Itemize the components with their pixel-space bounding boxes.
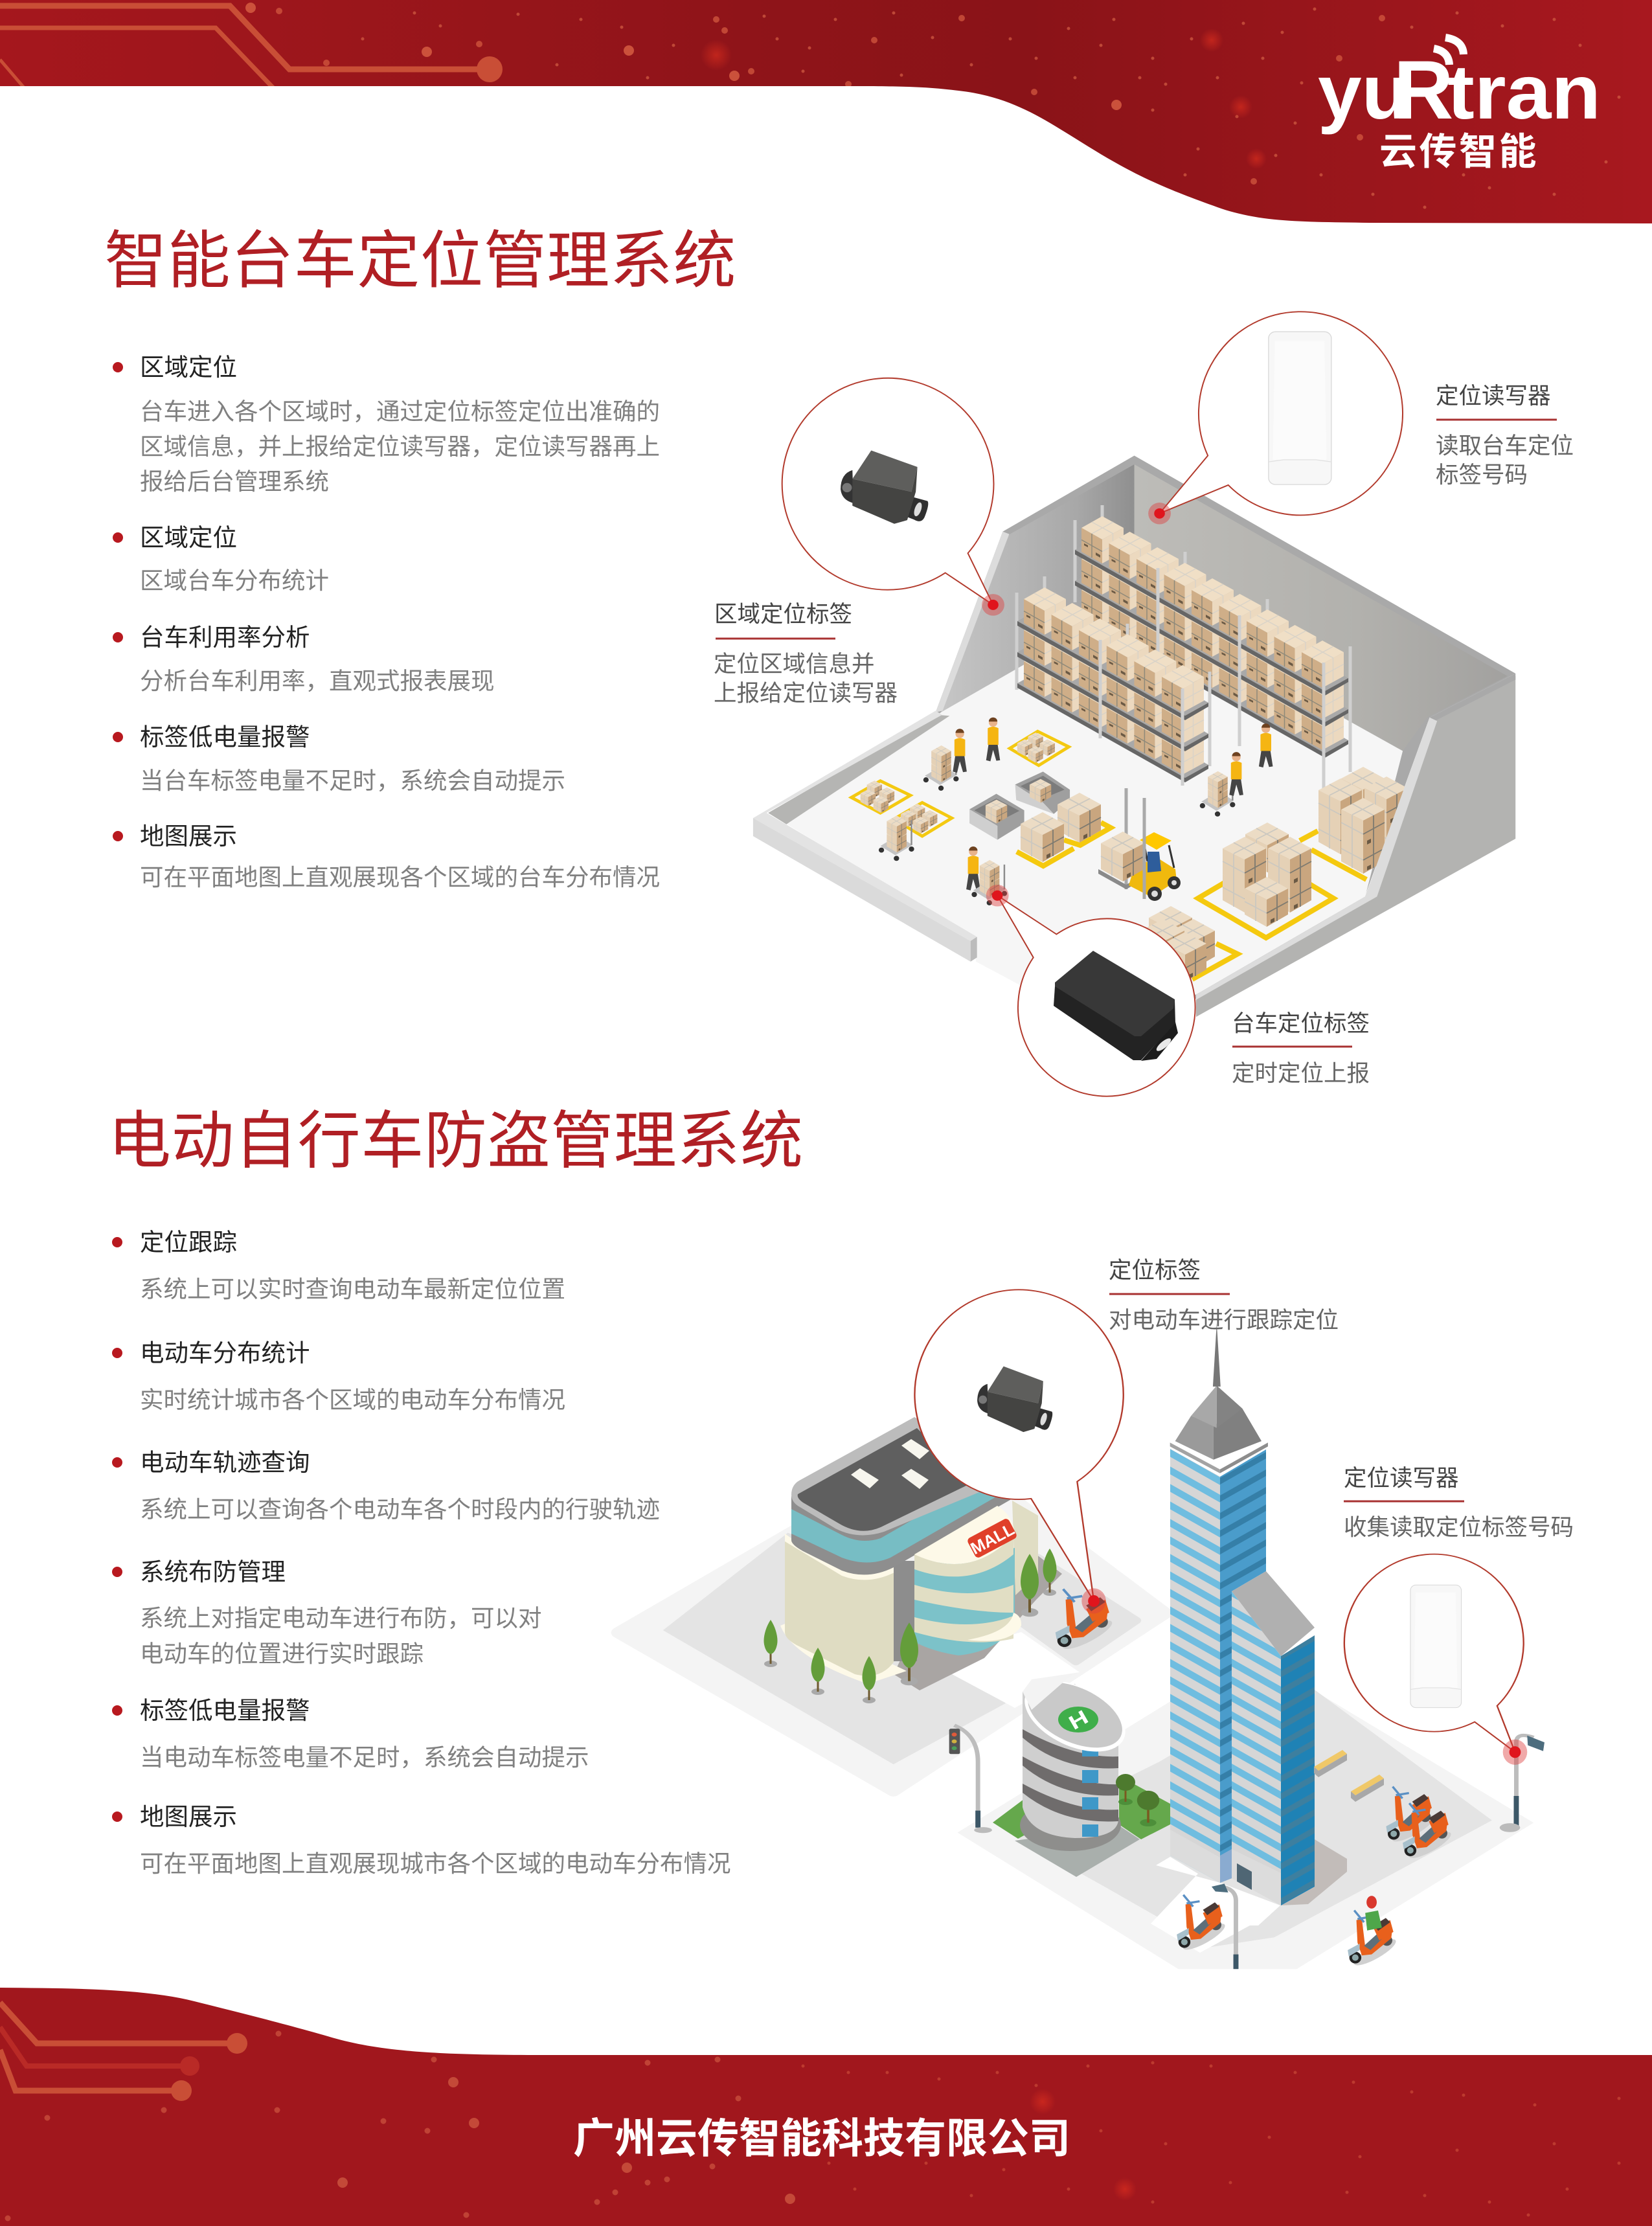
mall trees [764, 1549, 1057, 1703]
label: 定位读写器: 定位读写器 [1436, 383, 1551, 409]
logo wifi arcs [1434, 38, 1464, 65]
MALL sign: MALL [967, 1519, 1017, 1558]
logo: yuRtran: yu [1318, 49, 1410, 135]
item: 地图展示: 地图展示 [140, 823, 237, 850]
office tower [1170, 1449, 1347, 1905]
callout: trolley tag [986, 885, 1195, 1096]
label: 定位读写器 [1436, 383, 1574, 488]
helipad building [993, 1666, 1170, 1877]
small carton groups [861, 733, 1055, 834]
large carton stacks [1141, 767, 1408, 982]
item: 电动车分布统计 [112, 1339, 565, 1413]
item: 系统布防管理: 系统布防管理 [140, 1558, 286, 1585]
feature list: section 1 [113, 354, 660, 891]
device: trolley tag [1054, 951, 1178, 1061]
forklift [1098, 788, 1181, 901]
item: 电动车轨迹查询: 电动车轨迹查询 [140, 1449, 310, 1476]
item: 区域定位: 区域定位 [140, 354, 237, 381]
item: 定位跟踪: 定位跟踪 [140, 1229, 237, 1256]
title: section 2: 电动自行车防盗管理系统 [108, 1106, 804, 1176]
item: 台车利用率分析: 台车利用率分析 [140, 624, 310, 651]
item: 电动车轨迹查询: 系统上可以查询各个电动车各个时段内的行驶轨迹 [140, 1496, 660, 1523]
callout: reader [1344, 1554, 1527, 1765]
label: 定位读写器: 读取台车定位 [1436, 433, 1574, 459]
item: 电动车分布统计: 电动车分布统计 [140, 1339, 310, 1367]
label: 定位标签: 定位标签 [1109, 1257, 1201, 1283]
top red banner [0, 0, 1652, 223]
item: 电动车分布统计: 实时统计城市各个区域的电动车分布情况 [140, 1387, 565, 1413]
item: 标签低电量报警 [112, 1697, 589, 1771]
callouts with markers [782, 312, 1403, 1096]
logo chinese name: 云传智能 [1379, 131, 1539, 173]
callout: reader [1148, 312, 1403, 525]
item: 标签低电量报警: 标签低电量报警 [140, 723, 310, 751]
item: 区域定位: 台车进入各个区域时，通过定位标签定位出准确的 [140, 398, 660, 425]
mall building [780, 1417, 1062, 1690]
item: 标签低电量报警: 标签低电量报警 [140, 1697, 310, 1724]
logo: yuRtran [1318, 38, 1601, 173]
yellow floor markings [852, 731, 1069, 836]
item: 系统布防管理 [112, 1558, 541, 1667]
item: 标签低电量报警 [113, 723, 565, 794]
bottom red banner [0, 1988, 1652, 2226]
front rack with cartons [1017, 576, 1210, 786]
item: 台车利用率分析 [113, 624, 495, 694]
warehouse walls and floor [753, 456, 1515, 999]
label: 区域定位标签: 定位区域信息并 [714, 651, 875, 677]
item: 地图展示: 地图展示 [140, 1803, 237, 1830]
item: 台车利用率分析: 分析台车利用率，直观式报表展现 [140, 668, 495, 694]
scooters [1056, 1589, 1454, 1970]
item: 地图展示: 可在平面地图上直观展现各个区域的台车分布情况 [140, 864, 660, 891]
item: 区域定位 statistics: 区域定位 [140, 524, 237, 551]
item: 系统布防管理: 系统上对指定电动车进行布防，可以对 [140, 1605, 541, 1631]
grey bins [969, 771, 1070, 840]
logo: yuRtran: tran [1447, 49, 1601, 135]
callout: zone tag [782, 378, 1004, 616]
label: 区域定位标签: 区域定位标签 [714, 601, 852, 627]
item: 区域定位: 报给后台管理系统 [140, 468, 329, 495]
label: 定位读写器: 定位读写器 [1344, 1465, 1459, 1491]
feature list: section 2 [112, 1229, 730, 1877]
street lights [949, 1725, 1545, 1969]
item: 区域定位 [113, 354, 660, 495]
warehouse illustration [753, 312, 1515, 1096]
item: 区域定位 statistics: 区域台车分布统计 [140, 567, 329, 594]
ground plates [618, 1445, 1533, 1969]
label: 定位读写器: 收集读取定位标签号码 [1344, 1514, 1574, 1540]
label: 定位读写器: 标签号码 [1436, 462, 1528, 488]
item: 标签低电量报警: 当电动车标签电量不足时，系统会自动提示 [140, 1744, 589, 1771]
item: 地图展示: 可在平面地图上直观展现城市各个区域的电动车分布情况 [140, 1850, 730, 1877]
label: 定位读写器 [1344, 1465, 1574, 1540]
tower roof and spire [1170, 1323, 1268, 1473]
item: 区域定位 statistics [113, 524, 329, 594]
city illustration [618, 1289, 1545, 1970]
benches [1314, 1750, 1384, 1802]
label: 区域定位标签: 上报给定位读写器 [714, 680, 898, 706]
item: 定位跟踪: 系统上可以实时查询电动车最新定位位置 [140, 1276, 565, 1302]
label: 台车定位标签: 定时定位上报 [1232, 1060, 1370, 1086]
logo: yuRtran: R [1394, 44, 1453, 137]
label: 定位标签 [1109, 1257, 1339, 1333]
workers and trolleys [879, 718, 1273, 905]
item: 电动车轨迹查询 [112, 1449, 660, 1523]
title: section 1: 智能台车定位管理系统 [104, 225, 736, 296]
rear rack with cartons [1075, 505, 1350, 789]
label: 区域定位标签 [714, 601, 898, 706]
large yellow floor frames [1017, 823, 1366, 979]
callouts with markers [914, 1289, 1527, 1765]
label: 台车定位标签 [1232, 1010, 1370, 1086]
item: 标签低电量报警: 当台车标签电量不足时，系统会自动提示 [140, 767, 565, 794]
right end wall [1196, 674, 1515, 1017]
mall glass front [914, 1548, 1015, 1655]
label: 台车定位标签: 台车定位标签 [1232, 1010, 1370, 1036]
company name: 广州云传智能科技有限公司 [573, 2115, 1070, 2162]
white paving patches [928, 1632, 1280, 1953]
pallet cartons [1021, 793, 1101, 862]
item: 地图展示 [112, 1803, 730, 1877]
item: 地图展示 [113, 823, 660, 891]
item: 定位跟踪 [112, 1229, 565, 1302]
item: 系统布防管理: 电动车的位置进行实时跟踪 [140, 1641, 424, 1667]
callout: tracking tag [914, 1289, 1124, 1614]
label: 定位标签: 对电动车进行跟踪定位 [1109, 1307, 1339, 1333]
item: 区域定位: 区域信息，并上报给定位读写器，定位读写器再上 [140, 433, 660, 460]
helipad building: H [1065, 1706, 1092, 1734]
